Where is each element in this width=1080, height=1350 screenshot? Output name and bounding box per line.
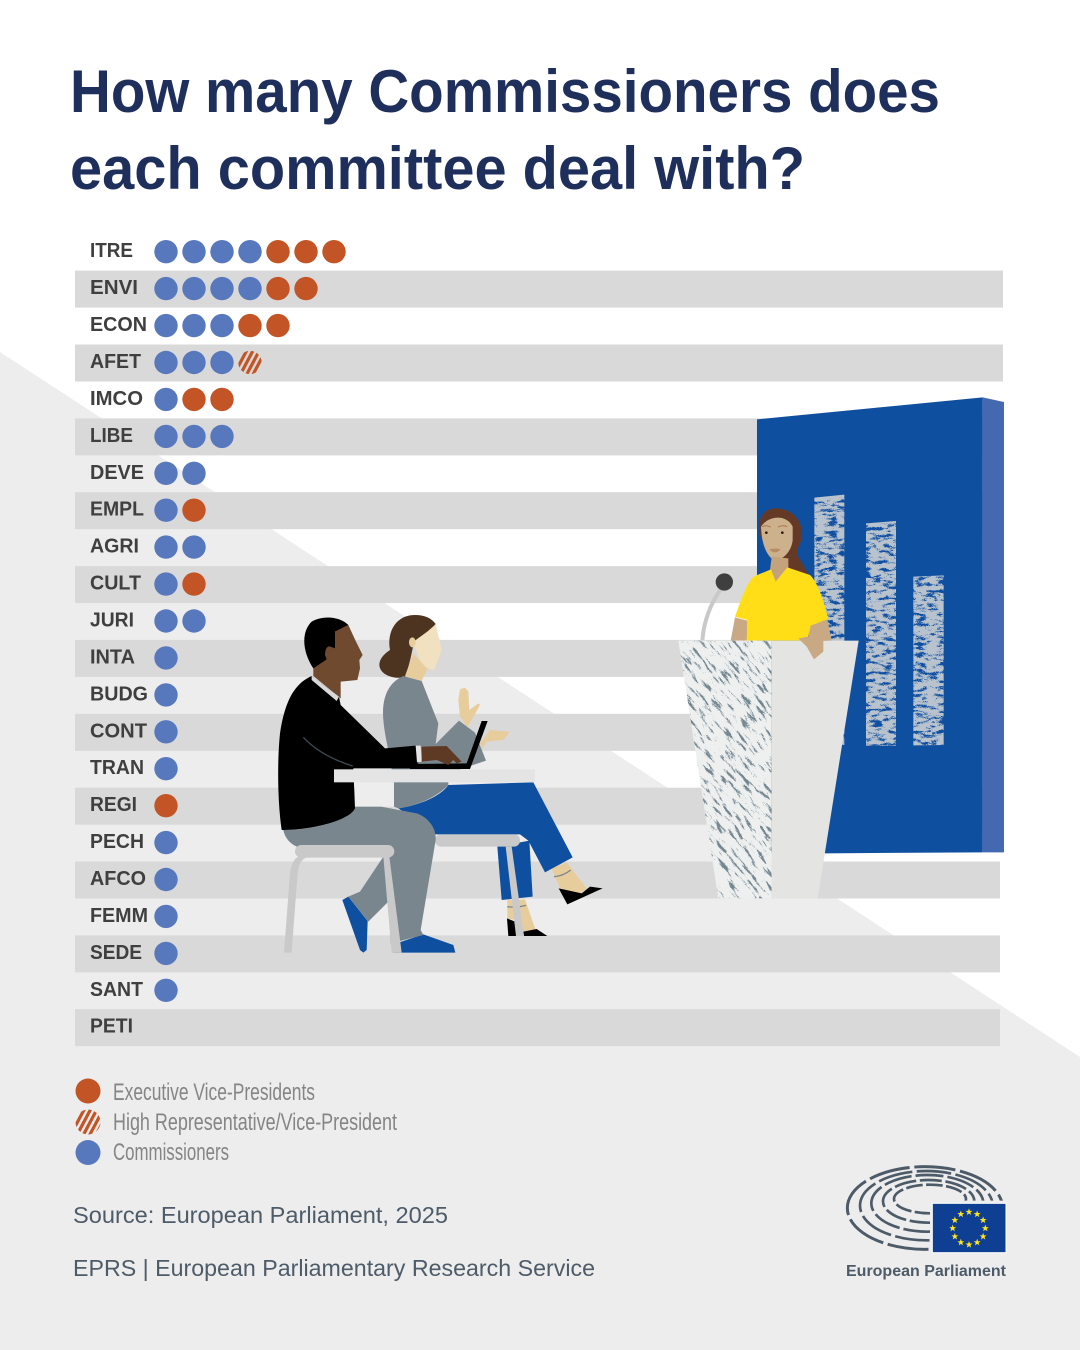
title: How many Commissioners does <box>70 58 940 125</box>
row: LIBE: LIBE <box>90 425 133 447</box>
row: ITRE: ITRE <box>90 240 133 262</box>
podium <box>678 640 859 898</box>
legend item: High Representative/Vice-President <box>76 1109 397 1136</box>
row: REGI <box>75 788 1003 825</box>
legend <box>76 1078 397 1166</box>
row: PECH: PECH <box>90 831 144 853</box>
row: TRAN: TRAN <box>90 757 144 779</box>
row: FEMM <box>90 905 178 928</box>
row: FEMM: FEMM <box>90 905 148 927</box>
row: IMCO <box>90 388 234 411</box>
row: DEVE: DEVE <box>90 462 144 484</box>
row: BUDG <box>90 683 178 707</box>
row: CULT: CULT <box>90 573 141 595</box>
row: PETI: PETI <box>90 1016 133 1038</box>
EPRS credit: EPRS | European Parliamentary Research Service <box>73 1255 595 1281</box>
row: IMCO: IMCO <box>90 388 143 410</box>
row: AGRI <box>90 535 206 559</box>
legend item: Commissioners <box>76 1139 229 1166</box>
speaker arm <box>798 619 832 659</box>
title <box>70 58 940 202</box>
row: CONT: CONT <box>90 720 147 742</box>
blue board <box>757 397 1004 853</box>
man chair <box>284 845 402 953</box>
row: INTA <box>75 640 1003 677</box>
row: SEDE: SEDE <box>90 942 142 964</box>
legend item: Executive Vice-Presidents <box>76 1078 315 1106</box>
woman <box>379 615 603 936</box>
row: AFCO <box>75 862 1000 898</box>
row: AGRI: AGRI <box>90 536 139 558</box>
row: AFET <box>75 344 1003 382</box>
title: each committee deal with? <box>70 135 805 202</box>
row: CONT <box>75 714 1003 751</box>
illustration: two seated people at a table <box>278 615 603 953</box>
row: TRAN <box>90 757 178 780</box>
row: DEVE <box>90 462 206 485</box>
legend item: Commissioners: Commissioners <box>113 1139 229 1166</box>
row: SANT: SANT <box>90 979 143 1001</box>
row: ECON: ECON <box>90 314 147 336</box>
row: AFCO: AFCO <box>90 868 146 890</box>
table <box>334 769 535 807</box>
row: REGI: REGI <box>90 794 137 816</box>
laptop <box>410 721 488 769</box>
diagonal grey background <box>0 352 1080 1350</box>
speaker <box>731 508 828 641</box>
man <box>278 618 462 953</box>
illustration: speaker at podium with blue board <box>678 397 1004 898</box>
row: AFET: AFET <box>90 351 141 373</box>
row: SEDE <box>75 935 1000 972</box>
row: CULT <box>75 566 1003 603</box>
row: EMPL <box>75 492 1003 529</box>
row: SANT <box>90 979 178 1002</box>
bars on board <box>814 495 944 746</box>
woman chair <box>435 834 524 936</box>
logo wordmark: European Parliament <box>846 1263 1007 1280</box>
row: ENVI: ENVI <box>90 277 138 299</box>
row: ITRE <box>90 240 346 263</box>
European Parliament logo <box>846 1167 1007 1280</box>
dot chart: committees <box>75 240 1003 1046</box>
logo: hemicycle and flag <box>847 1167 1006 1253</box>
row: PETI <box>75 1009 1000 1046</box>
row: LIBE <box>75 418 1003 455</box>
row: BUDG: BUDG <box>90 683 148 705</box>
row: JURI <box>90 609 206 633</box>
legend item: High Representative/Vice-President: High Representative/Vice-President <box>113 1109 397 1136</box>
row: ENVI <box>75 271 1003 308</box>
row: JURI: JURI <box>90 610 134 632</box>
source line: Source: European Parliament, 2025 <box>73 1202 448 1228</box>
row: PECH <box>90 831 178 854</box>
legend item: Executive Vice-Presidents: Executive Vice-Presidents <box>113 1079 315 1106</box>
row: ECON <box>90 314 290 337</box>
row: EMPL: EMPL <box>90 499 144 521</box>
microphone <box>702 573 733 642</box>
row: INTA: INTA <box>90 646 135 668</box>
